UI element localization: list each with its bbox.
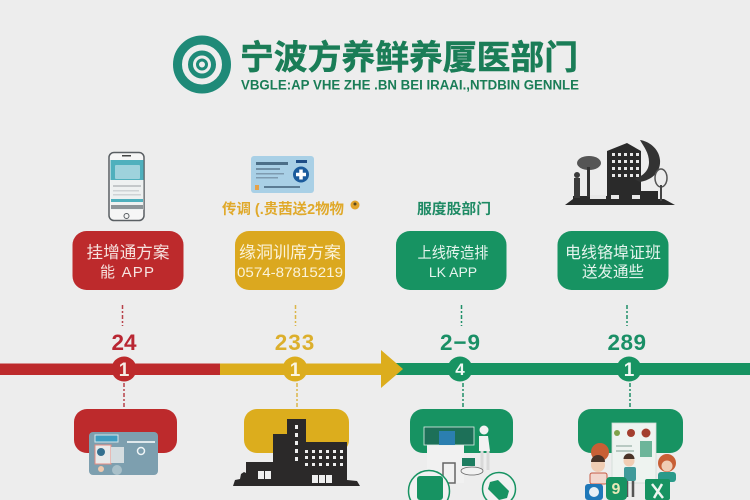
dashed connector: yellow upper [294,305,296,326]
panel: red step box: 挂增通方案 [86,243,170,262]
timeline marker: red 1: 1 [119,360,130,381]
timeline bar: red segment [0,364,220,375]
panel: yellow step box: 0574-87815219 [237,264,343,280]
dashed connector: green upper two [626,305,628,326]
dashed connector: green lower one [462,383,464,409]
panel: yellow step box: 缘洞训席方案 [239,243,342,262]
subtitle: VBGLE:AP VHE ZHE .BN BEI IRAAI.,NTDBIN GENNLE [241,78,579,92]
panel: green step box one [396,231,506,290]
number: 289: 289 [607,330,647,355]
panel: red step box: 能 APP [100,264,154,281]
panel: red lower box with card icon [74,409,177,475]
dashed connector: green upper one [460,305,462,326]
title: 宁波方养鲜养厦医部门 [240,40,578,77]
timeline marker: green 4: 4 [455,360,465,379]
panel: green lower box with people icon: 9 [612,481,621,498]
timeline marker: green 1: 1 [624,360,635,381]
icon: medical card [251,156,314,193]
dashed connector: red lower [123,383,125,409]
panel: green step box two: 电线铬埠证班 [565,243,661,262]
icon: hospital building [565,140,675,205]
timeline bar: green segment [395,363,750,375]
panel: green lower box with delivery icon [408,409,516,500]
number: 2-9: 2−9 [440,330,480,355]
icon: smartphone [109,152,144,220]
dashed connector: green lower two [629,383,631,409]
timeline marker: red 1 [112,356,136,382]
panel: green step box two: 送发通些 [582,263,644,281]
panel: green step box two [558,231,668,290]
timeline marker: green 4 [448,356,472,382]
timeline marker: green 1 [616,356,642,382]
icon: target logo [178,40,226,89]
panel: green step box one: 上线砖造排 [418,244,488,262]
timeline marker: yellow 1 [282,356,308,382]
number: 233: 233 [275,330,315,355]
panel: yellow step box [235,231,345,290]
dashed connector: red upper [122,305,124,326]
panel: yellow lower box with building icon [233,409,360,486]
panel: green step box one: LK APP [429,264,477,280]
yellow caption: 传调 (.贵茜送2物物 [222,200,344,218]
timeline marker: yellow 1: 1 [290,360,301,381]
timeline bar: yellow segment with arrow [220,350,403,388]
panel: green lower box with people icon [578,409,683,500]
green caption: 服度股部门 [417,200,491,218]
number: 24: 24 [111,330,137,355]
panel: red step box [72,231,184,290]
dashed connector: yellow lower [296,383,298,409]
